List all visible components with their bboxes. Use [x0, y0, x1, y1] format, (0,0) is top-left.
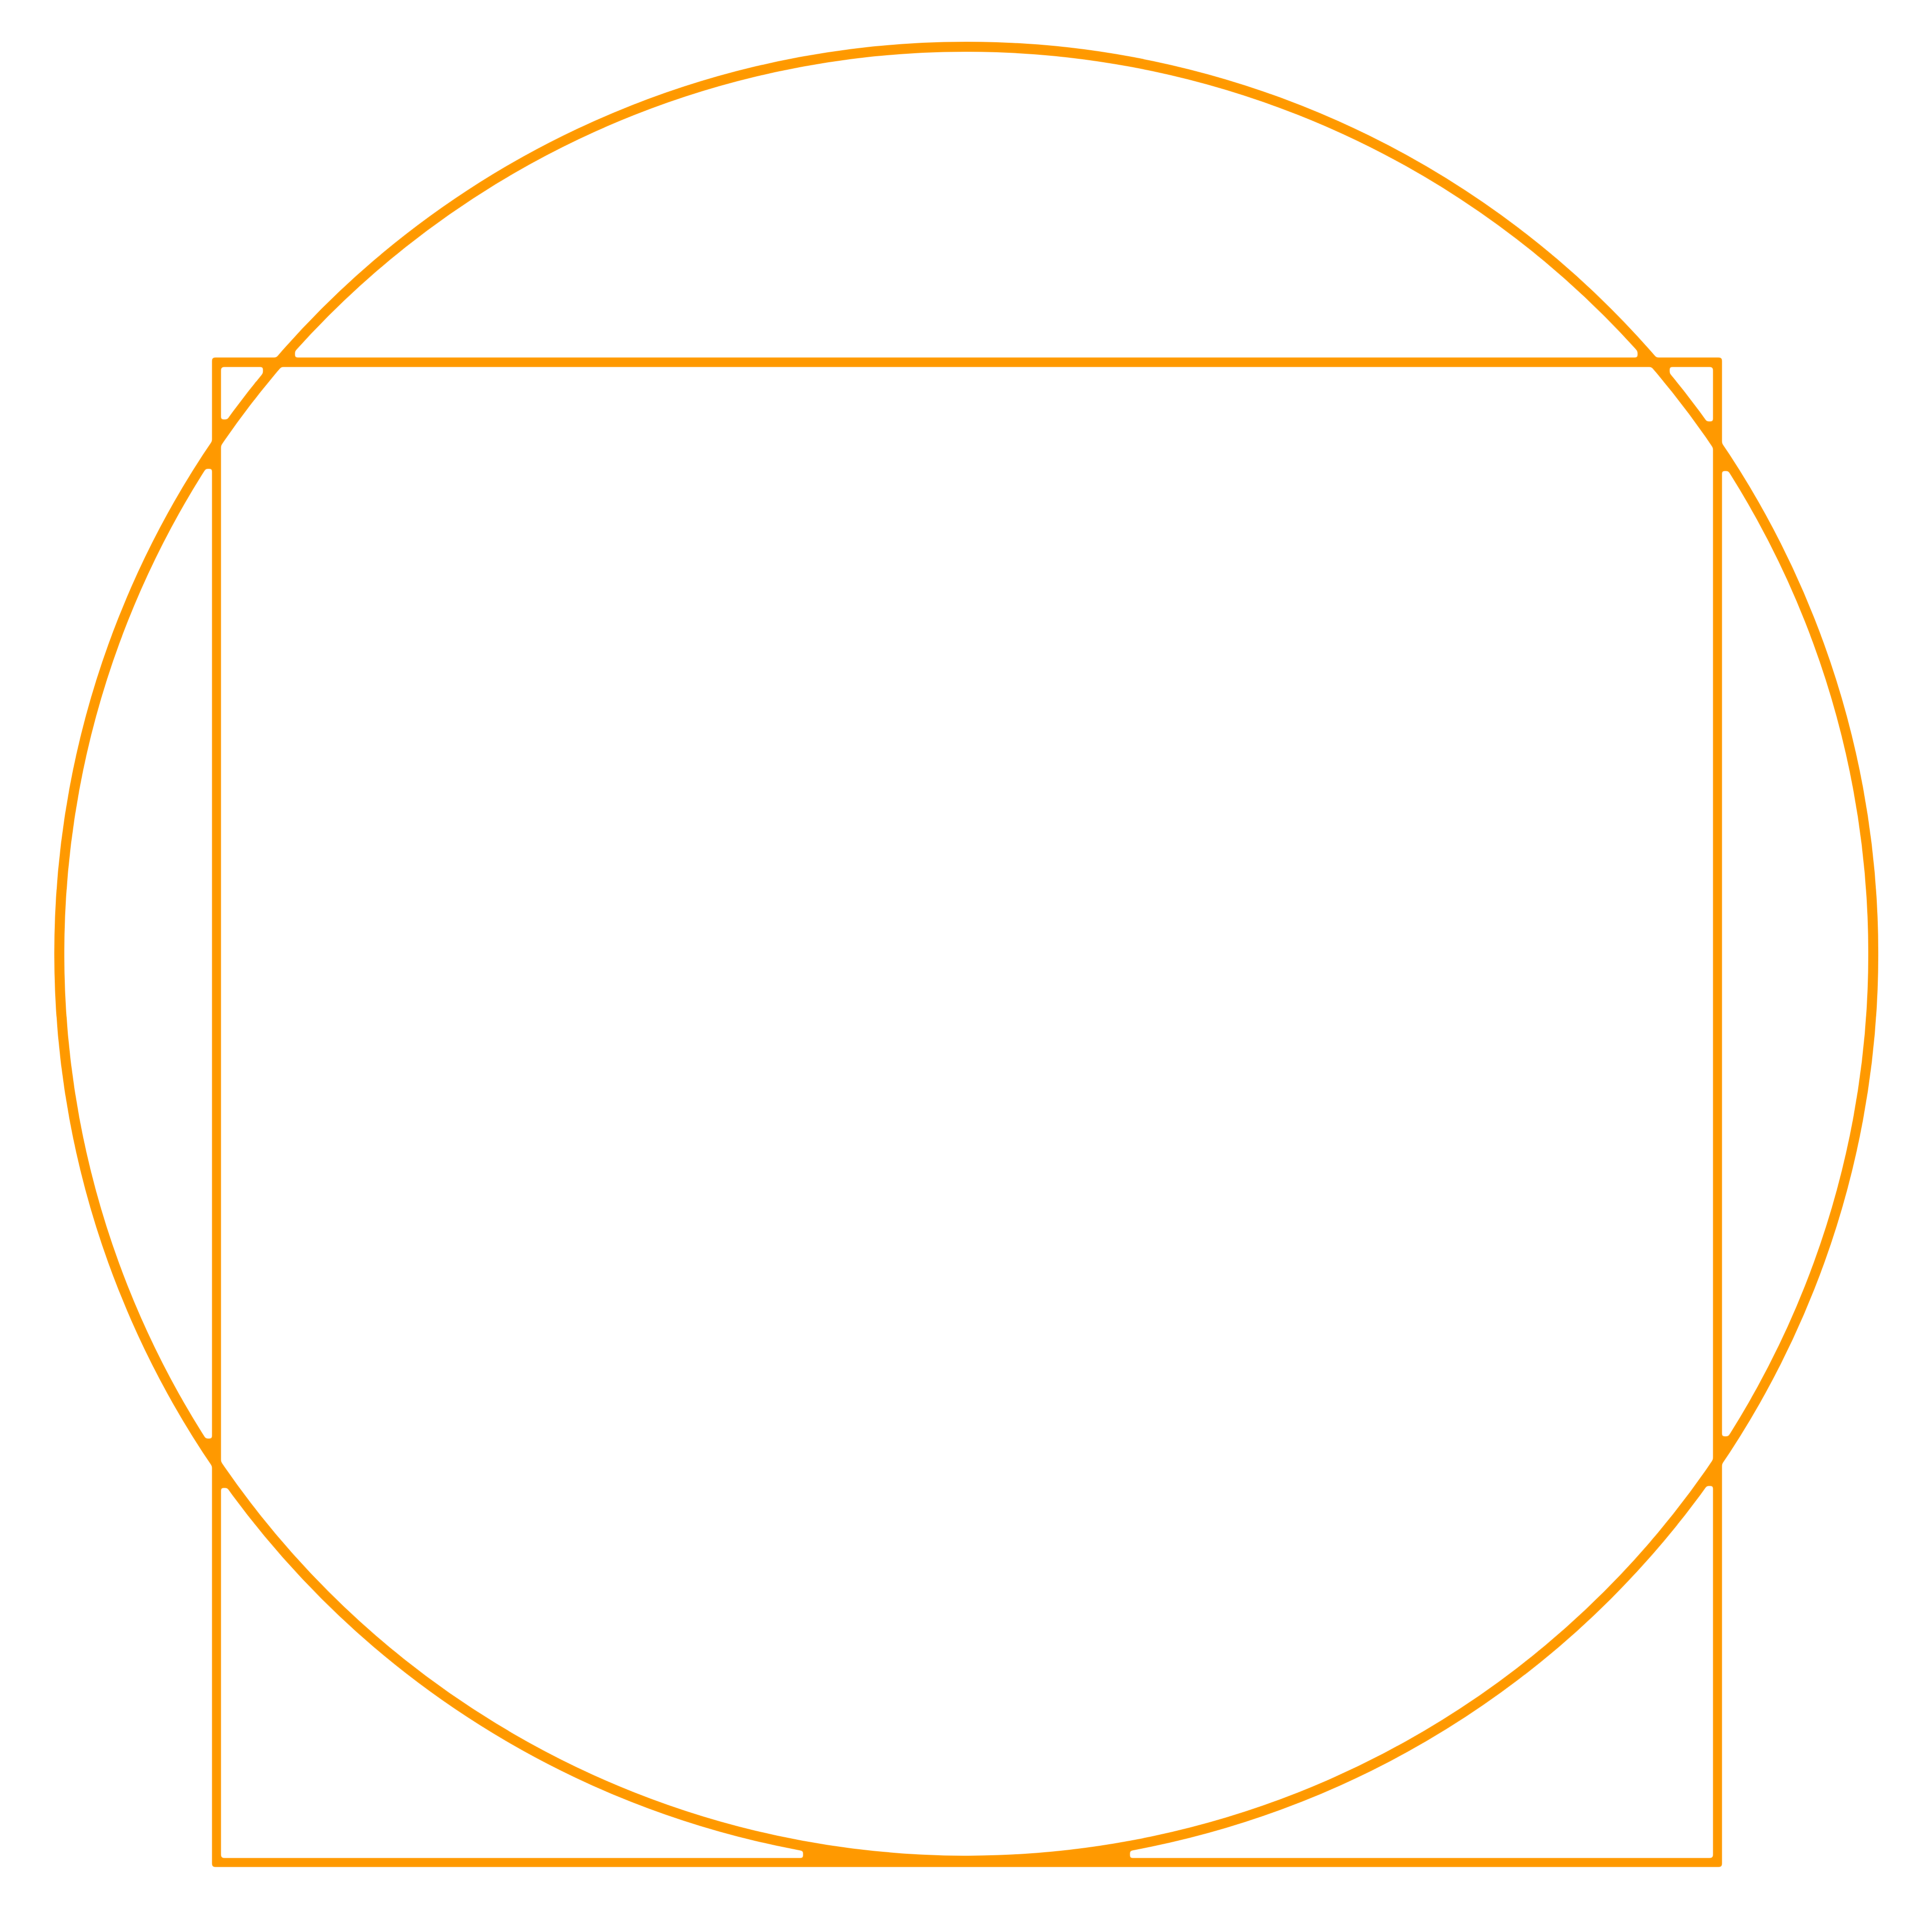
bottom wedge where circle meets square [803, 1846, 1130, 1861]
square outline [212, 358, 1722, 1867]
